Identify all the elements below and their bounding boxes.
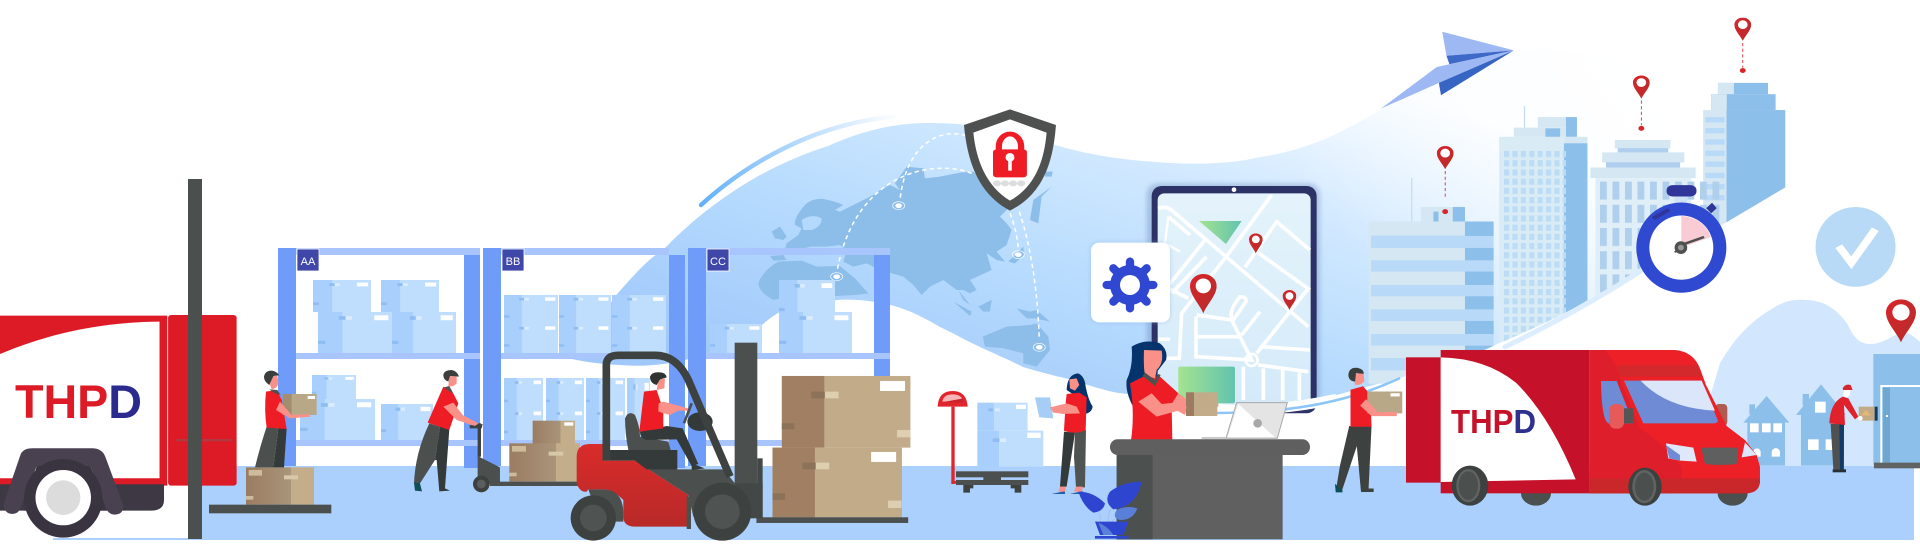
cargo boxes at scale — [977, 403, 1043, 467]
stopwatch — [1636, 185, 1726, 293]
truck logo: THPD — [15, 375, 142, 428]
shelf stored boxes — [300, 280, 852, 440]
label BB: BB — [506, 256, 520, 268]
woman with clipboard — [1035, 373, 1093, 494]
forklift vehicle — [571, 343, 763, 541]
delivery man — [1829, 385, 1878, 472]
continents — [758, 167, 1053, 367]
laptop — [1202, 403, 1287, 439]
left delivery truck — [0, 315, 237, 538]
worker carrying box — [255, 371, 317, 467]
map roads — [1158, 195, 1310, 400]
label CC: CC — [710, 256, 726, 268]
light streak on wave edge — [1505, 268, 1645, 347]
houses — [1743, 384, 1846, 466]
check badge — [1816, 207, 1896, 287]
label AA: AA — [301, 256, 316, 268]
building 4 — [1703, 83, 1785, 226]
worker carrying parcel to van — [1335, 368, 1402, 492]
paper plane — [1381, 32, 1514, 109]
map markers — [1199, 221, 1242, 244]
shelf frames — [278, 248, 890, 468]
white ground sweep below wave — [1100, 130, 1920, 553]
label AA — [297, 249, 319, 271]
arc streak above globe — [701, 116, 900, 205]
label BB — [502, 249, 524, 271]
white curve over tablet base — [1090, 388, 1345, 416]
pole — [188, 179, 202, 539]
shield with lock — [964, 109, 1056, 211]
destination pin — [1886, 299, 1916, 342]
panel: warehouse shelves — [278, 248, 890, 468]
settings gear card — [1091, 243, 1170, 322]
building 1 — [1369, 178, 1494, 384]
panel: forklift — [571, 343, 910, 541]
blue wave streak — [1215, 378, 1400, 413]
floor — [53, 466, 1914, 540]
panel: skyline icons — [1437, 18, 1896, 293]
cargo on forks — [756, 376, 910, 523]
tablet with map — [1147, 183, 1320, 413]
label CC — [707, 249, 729, 271]
building 2 — [1499, 106, 1587, 345]
skyline buildings — [1369, 83, 1785, 384]
customer door — [1873, 354, 1920, 468]
dashed routes — [837, 134, 1039, 340]
globe continents and routes — [758, 134, 1053, 367]
pallet with box — [209, 467, 331, 513]
woman at counter — [1126, 341, 1218, 440]
van logo: THPD — [1451, 403, 1536, 440]
potted plant — [1078, 482, 1142, 539]
reception desk — [1110, 439, 1310, 539]
weighing scale — [938, 391, 1028, 493]
panel: scale area — [938, 373, 1093, 494]
panel: neighbourhood — [1743, 299, 1920, 472]
route markers — [831, 202, 1045, 351]
background wave blob — [567, 49, 1828, 409]
worker pushing pallet jack — [414, 370, 580, 492]
building 3 — [1590, 140, 1696, 298]
blob right fade — [1000, 0, 1860, 420]
panel: workers at shelves — [209, 370, 580, 513]
hill behind houses — [1690, 300, 1920, 466]
forklift driver — [639, 372, 705, 470]
skyline pins — [1437, 18, 1751, 214]
building windows — [1504, 151, 1725, 341]
delivery van — [1406, 350, 1760, 506]
